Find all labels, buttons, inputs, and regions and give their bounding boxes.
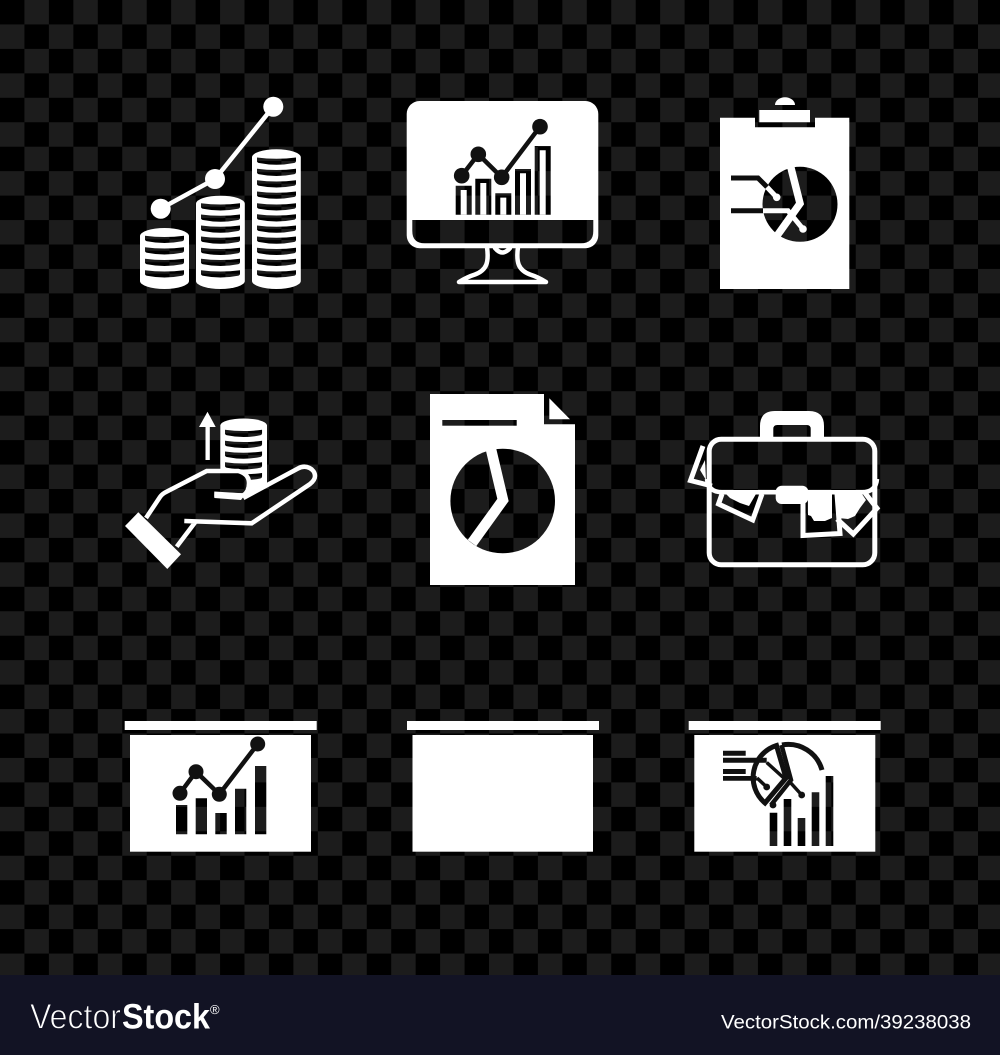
lower left banknote	[718, 494, 762, 520]
image URL text: VectorStock.com/39238038	[721, 1011, 971, 1033]
board top bar	[689, 721, 881, 730]
board surface	[694, 735, 875, 852]
coin stack in hand	[220, 418, 267, 495]
hand outline	[146, 467, 315, 547]
icon: document with pie chart	[430, 394, 575, 585]
pie cut	[472, 443, 503, 543]
icon: presentation board with chart	[125, 721, 317, 852]
shirt cuff	[125, 512, 181, 569]
footer band	[0, 975, 1000, 1055]
left upper banknote	[690, 446, 712, 486]
pie cuts and connectors	[731, 164, 807, 240]
small coin stack	[140, 228, 189, 289]
clipboard paper	[720, 118, 849, 289]
title line	[442, 420, 517, 426]
VectorStock logo	[30, 997, 220, 1036]
monitor lower strip	[412, 220, 593, 243]
VectorStock logo: Vector	[30, 997, 121, 1036]
icon: coin stacks with growth line	[140, 97, 301, 289]
clipboard clip	[759, 97, 810, 122]
VectorStock logo: ®	[210, 1002, 220, 1017]
trend line	[172, 736, 265, 802]
medium coin stack	[196, 196, 245, 289]
VectorStock logo: Stock	[122, 997, 210, 1036]
large coin stack	[252, 149, 301, 289]
icon: clipboard with pie chart	[720, 97, 849, 289]
icon: hand holding coins with arrow	[125, 412, 315, 569]
briefcase flap line	[707, 479, 877, 492]
icon: presentation board with pie and bars	[689, 721, 881, 852]
pie chart	[762, 167, 838, 242]
bar chart	[176, 766, 266, 834]
board top bar	[125, 721, 317, 730]
trend line	[454, 119, 548, 185]
bar chart	[770, 776, 833, 846]
middle banknote	[803, 494, 840, 536]
pie chart	[450, 449, 555, 553]
growth line with points	[151, 97, 283, 219]
pie chart outline	[753, 744, 822, 808]
board top bar	[407, 721, 599, 730]
legend lines	[723, 751, 767, 781]
icon: blank presentation board	[407, 721, 599, 852]
right banknote	[837, 493, 877, 534]
monitor stand	[459, 247, 546, 282]
folded corner	[549, 398, 570, 419]
up arrow	[199, 412, 216, 460]
board surface	[130, 735, 311, 852]
outlined bars	[456, 146, 551, 215]
briefcase handle	[760, 411, 824, 437]
monitor body	[407, 101, 598, 248]
board surface	[412, 735, 593, 852]
briefcase body	[709, 439, 875, 565]
icon: briefcase with money	[690, 411, 877, 565]
briefcase clasp	[776, 486, 808, 504]
document page	[430, 394, 575, 585]
icon: monitor with chart	[407, 101, 598, 282]
